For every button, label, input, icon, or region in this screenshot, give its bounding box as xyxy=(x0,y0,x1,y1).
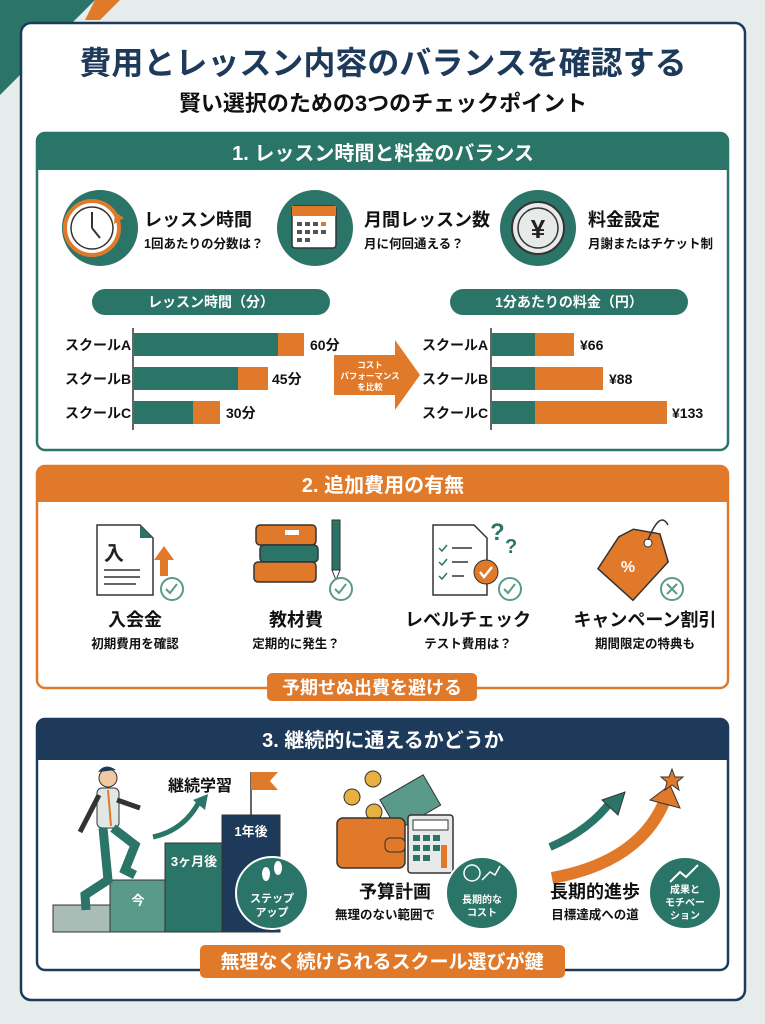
icon: entry document: 入 xyxy=(104,543,124,565)
icon: level check: ? xyxy=(505,536,517,558)
pill: lesson time minutes xyxy=(92,289,330,315)
bar chart: lesson minutes: スクールB xyxy=(65,371,131,387)
text: monthly lessons xyxy=(364,210,490,251)
text: long-term progress: 目標達成への道 xyxy=(551,907,639,922)
text: monthly lessons: 月に何回通える？ xyxy=(364,236,464,251)
badge: results and motivation: モチベー xyxy=(665,897,705,909)
badge: long-term cost: コスト xyxy=(467,907,497,919)
icon: discount tag: % xyxy=(621,559,635,576)
text: budget plan xyxy=(335,881,435,922)
badge: results and motivation xyxy=(649,857,721,929)
text: price setting xyxy=(588,210,713,251)
text: entry fee: 入会金 xyxy=(108,610,162,630)
text: budget plan: 予算計画 xyxy=(359,881,431,902)
bar chart: price per minute: ¥88 xyxy=(609,371,633,387)
illustration: steps xyxy=(53,766,280,932)
icon: yen coin: ¥ xyxy=(531,214,546,244)
illustration: steps: 3ヶ月後 xyxy=(171,854,217,869)
icon: yen coin xyxy=(500,190,576,266)
bar chart: lesson minutes xyxy=(65,328,340,430)
text: lesson time: 1回あたりの分数は？ xyxy=(144,236,263,251)
illustration: steps: 継続学習 xyxy=(168,776,232,795)
text: materials: 定期的に発生？ xyxy=(252,636,340,651)
bar chart: price per minute: スクールA xyxy=(422,337,488,353)
arrow: cost performance: パフォーマンス xyxy=(340,371,400,381)
text: campaign discount xyxy=(573,610,717,651)
bar chart: price per minute: ¥133 xyxy=(672,405,703,421)
heading 3: 3. 継続的に通えるかどうか xyxy=(262,729,504,752)
text: materials: 教材費 xyxy=(269,610,323,630)
text: level check xyxy=(405,610,531,651)
bar chart: lesson minutes: スクールA xyxy=(65,337,131,353)
illustration: steps: 今 xyxy=(131,893,145,908)
badge: step up: アップ xyxy=(256,906,288,919)
text: campaign discount: キャンペーン割引 xyxy=(573,610,717,630)
text: level check: レベルチェック xyxy=(405,610,531,630)
text: lesson time xyxy=(144,210,263,251)
text: monthly lessons: 月間レッスン数 xyxy=(364,210,490,230)
text: price setting: 月謝またはチケット制 xyxy=(588,236,713,251)
subtitle: 賢い選択のための3つのチェックポイント xyxy=(179,91,587,116)
text: budget plan: 無理のない範囲で xyxy=(335,907,435,922)
arrow: cost performance: を比較 xyxy=(357,382,383,392)
panel: 3 continuity xyxy=(37,719,728,970)
bar chart: price per minute xyxy=(422,328,703,430)
pill: price per minute: 1分あたりの料金（円） xyxy=(495,294,643,310)
badge: results and motivation: 成果と xyxy=(670,883,700,896)
heading 2: 2. 追加費用の有無 xyxy=(302,474,464,497)
callout: key to continuing: 無理なく続けられるスクール選びが鍵 xyxy=(220,950,544,973)
text: price setting: 料金設定 xyxy=(588,210,660,230)
illustration: steps: 1年後 xyxy=(234,824,268,839)
arrow: cost performance: コスト xyxy=(357,360,383,370)
bar chart: lesson minutes: 30分 xyxy=(226,405,256,421)
title: 費用とレッスン内容のバランスを確認する xyxy=(79,45,687,81)
callout: key to continuing xyxy=(200,945,565,978)
bar chart: price per minute: スクールB xyxy=(422,371,488,387)
arrow: cost performance xyxy=(334,340,420,410)
icon: level check xyxy=(433,519,521,600)
panel: 2 additional costs xyxy=(37,466,728,688)
icon: entry document xyxy=(97,525,183,600)
icon: discount tag xyxy=(594,520,683,605)
pill: lesson time minutes: レッスン時間（分） xyxy=(148,294,274,310)
illustration: growth arrows xyxy=(550,769,683,878)
badge: long-term cost xyxy=(446,857,518,929)
illustration: wallet and calculator xyxy=(337,771,453,873)
text: long-term progress: 長期的進歩 xyxy=(550,882,640,902)
badge: results and motivation: ション xyxy=(670,911,700,922)
text: level check: テスト費用は？ xyxy=(424,636,512,651)
bar chart: lesson minutes: 60分 xyxy=(310,337,340,353)
icon: calendar xyxy=(277,190,353,266)
bar chart: price per minute: ¥66 xyxy=(580,337,604,353)
badge: long-term cost: 長期的な xyxy=(462,893,502,906)
panel: 1 lesson time and price xyxy=(37,133,728,450)
text: long-term progress xyxy=(550,882,640,922)
bar chart: lesson minutes: スクールC xyxy=(65,405,131,421)
icon: books xyxy=(254,520,352,600)
badge: step up xyxy=(236,857,308,929)
badge: step up: ステップ xyxy=(250,892,294,905)
callout: avoid unexpected costs: 予期せぬ出費を避ける xyxy=(282,678,462,698)
bar chart: lesson minutes: 45分 xyxy=(272,371,302,387)
text: campaign discount: 期間限定の特典も xyxy=(595,636,695,651)
icon: level check: ? xyxy=(490,519,505,546)
icon: clock xyxy=(62,190,138,266)
text: entry fee xyxy=(91,610,179,651)
callout: avoid unexpected costs xyxy=(267,673,477,701)
text: entry fee: 初期費用を確認 xyxy=(91,636,179,651)
text: lesson time: レッスン時間 xyxy=(144,210,252,230)
text: materials xyxy=(252,610,340,651)
pill: price per minute xyxy=(450,289,688,315)
bar chart: price per minute: スクールC xyxy=(422,405,488,421)
heading 1: 1. レッスン時間と料金のバランス xyxy=(232,142,534,165)
